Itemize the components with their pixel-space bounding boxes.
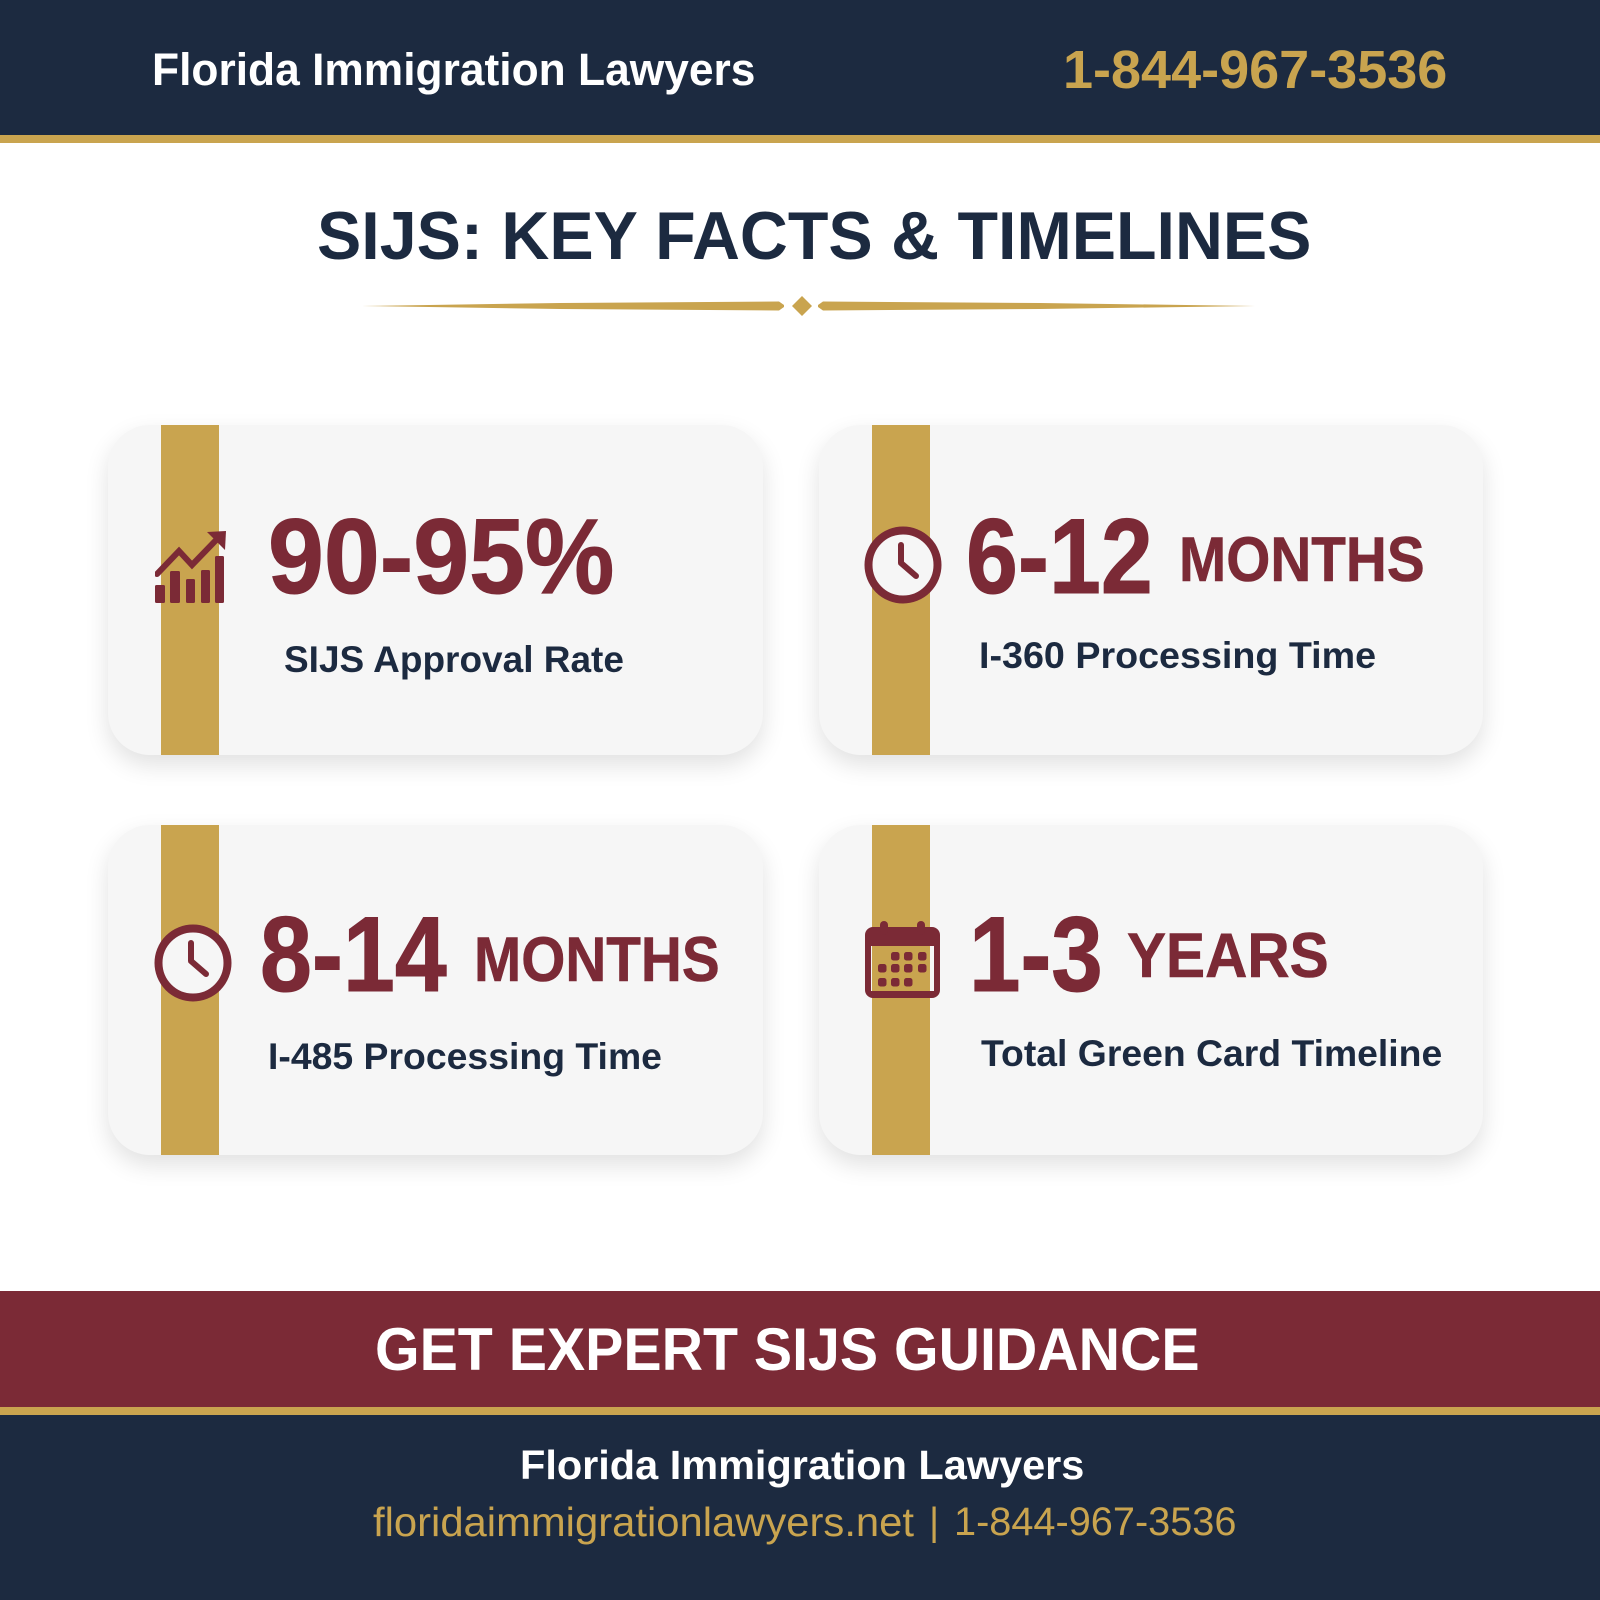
footer contact line	[373, 1499, 1236, 1545]
icon: clock	[864, 526, 942, 604]
gold header rule	[0, 135, 1600, 143]
card: total timeline	[819, 825, 1483, 1155]
header phone number: 1-844-967-3536	[1063, 40, 1447, 100]
footer firm name: Florida Immigration Lawyers	[520, 1442, 1084, 1488]
icon: growth chart	[155, 531, 226, 603]
gold band	[872, 425, 930, 755]
footer phone number: 1-844-967-3536	[954, 1500, 1236, 1544]
icon: clock	[154, 924, 232, 1002]
stat label: I-360 Processing Time	[979, 635, 1376, 676]
separator: |	[929, 1501, 939, 1544]
card: I-485 processing	[108, 825, 763, 1155]
banner text: GET EXPERT SIJS GUIDANCE	[375, 1316, 1200, 1383]
stat value: 1-3	[969, 894, 1103, 1014]
gold band	[872, 825, 930, 1155]
top header band	[0, 0, 1600, 143]
stat label: Total Green Card Timeline	[981, 1033, 1442, 1074]
gold band	[160, 425, 218, 755]
stat label: SIJS Approval Rate	[284, 639, 624, 680]
stat unit: YEARS	[1127, 921, 1329, 991]
stat value: 90-95%	[268, 496, 614, 616]
website address: floridaimmigrationlawyers.net	[373, 1499, 914, 1545]
title divider	[364, 296, 1254, 316]
card: I-360 processing	[819, 425, 1483, 755]
gold band	[160, 825, 218, 1155]
stat value: 8-14	[260, 894, 447, 1014]
stat unit: MONTHS	[474, 925, 720, 995]
main title: SIJS: KEY FACTS & TIMELINES	[317, 198, 1311, 274]
call to action banner	[0, 1291, 1600, 1407]
stat unit: MONTHS	[1179, 525, 1425, 595]
gold footer rule	[0, 1407, 1600, 1415]
header firm name: Florida Immigration Lawyers	[152, 44, 755, 95]
icon: calendar	[865, 921, 940, 998]
stat value: 6-12	[966, 496, 1153, 616]
card: approval rate	[108, 425, 763, 755]
footer band	[0, 1407, 1600, 1600]
stat label: I-485 Processing Time	[268, 1036, 662, 1077]
